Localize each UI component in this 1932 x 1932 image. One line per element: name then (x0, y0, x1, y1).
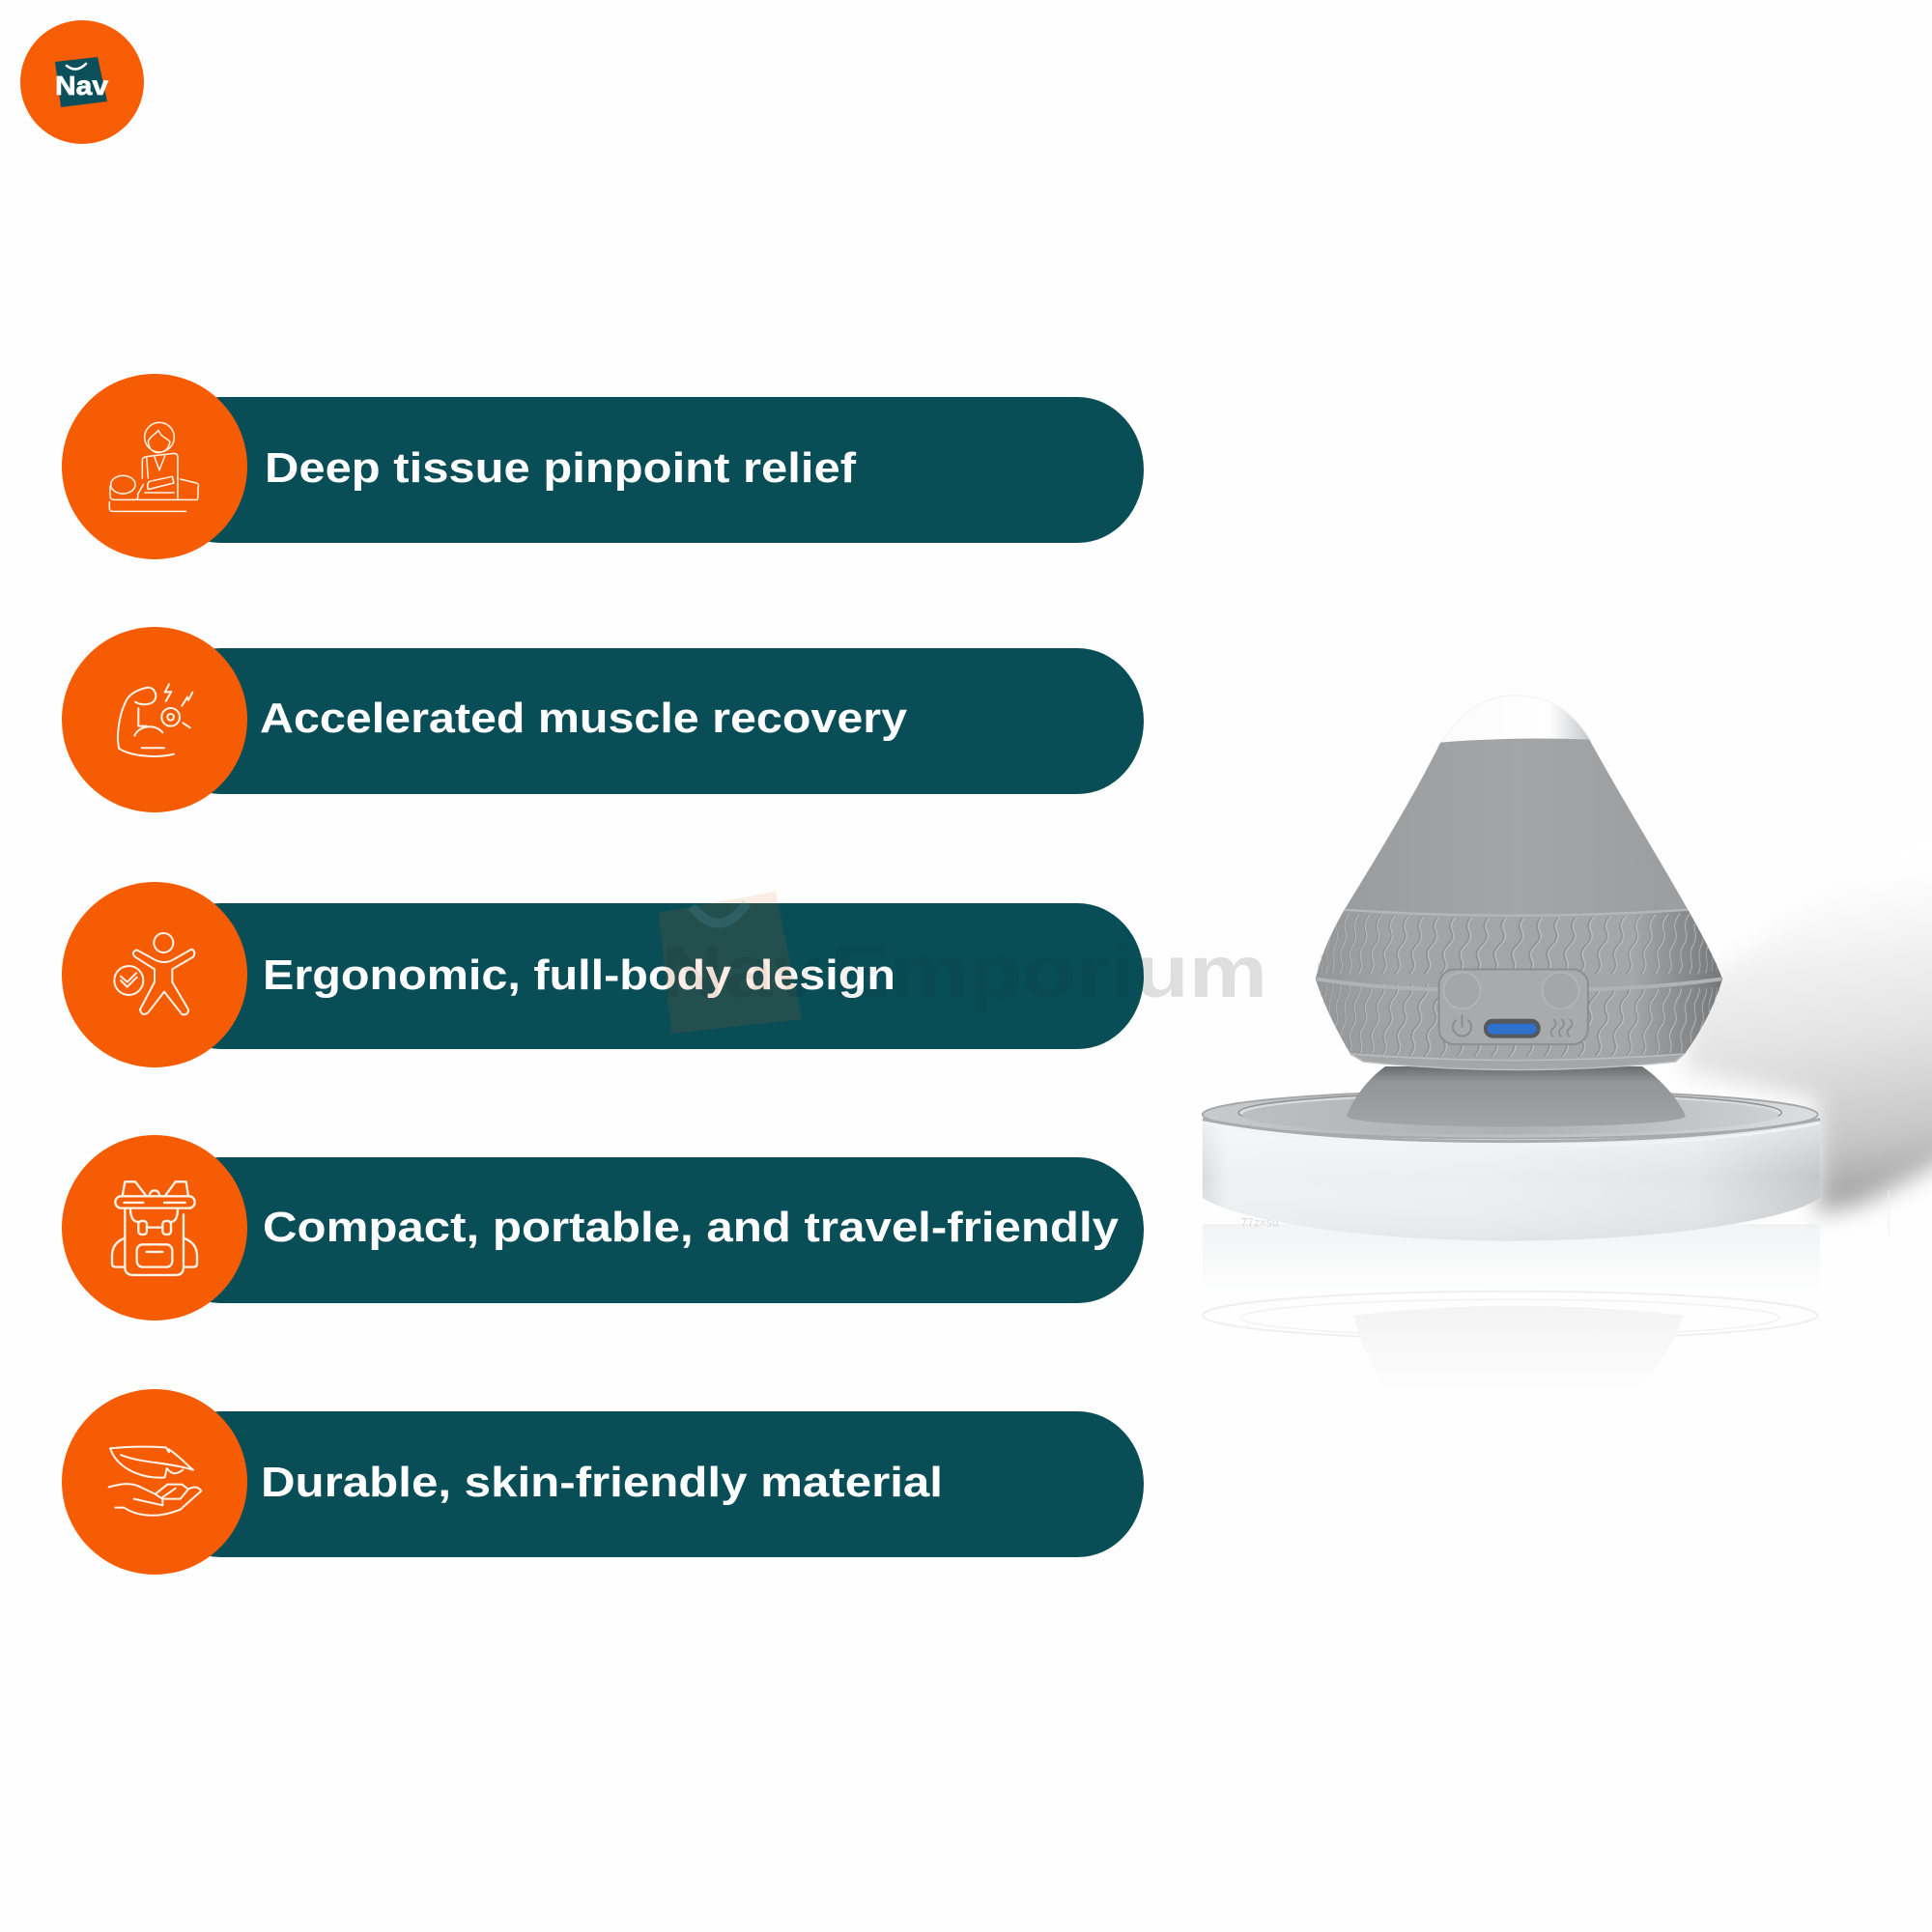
base neck (1347, 1066, 1686, 1126)
label: Compact, portable, and travel-friendly (263, 1204, 1120, 1251)
icon: feather over hand (109, 1447, 201, 1516)
panel: feature pill 3 (62, 882, 1144, 1067)
reflection (1203, 1190, 1889, 1397)
cast shadow (1683, 820, 1932, 1214)
brand logo badge: Nav (55, 71, 108, 100)
reflection: 77z×sd (1241, 1216, 1279, 1230)
label: Deep tissue pinpoint relief (265, 444, 856, 492)
watermark: Nav Emporium: Emporium (831, 931, 1267, 1013)
watermark backdrop: Emporium outside pill: Emporium (831, 931, 1267, 1013)
label: Ergonomic, full-body design (263, 952, 895, 999)
charging base (1203, 1091, 1820, 1241)
icon: backpack (112, 1181, 197, 1275)
control panel (1439, 969, 1588, 1044)
white dome tip (1440, 696, 1591, 744)
icon: ergonomic body (114, 933, 194, 1014)
icon: flexed muscle (118, 684, 192, 756)
cone (1345, 738, 1688, 916)
icon: massage therapist (109, 422, 199, 511)
panel: feature pill 1 (62, 374, 1144, 559)
watermark: Nav Emporium (659, 892, 1267, 1034)
panel: feature pill 2 (62, 627, 1144, 812)
panel: feature pill 5 (62, 1389, 1144, 1575)
body lip (1350, 1054, 1684, 1069)
watermark: Nav Emporium: Nav (661, 931, 821, 1013)
textured body (1316, 902, 1722, 1062)
label: Accelerated muscle recovery (260, 695, 908, 742)
panel: feature pill 4 (62, 1135, 1144, 1321)
brand logo badge (20, 20, 144, 144)
label: Durable, skin-friendly material (261, 1459, 943, 1506)
product: massager on charging base (1203, 696, 1932, 1397)
